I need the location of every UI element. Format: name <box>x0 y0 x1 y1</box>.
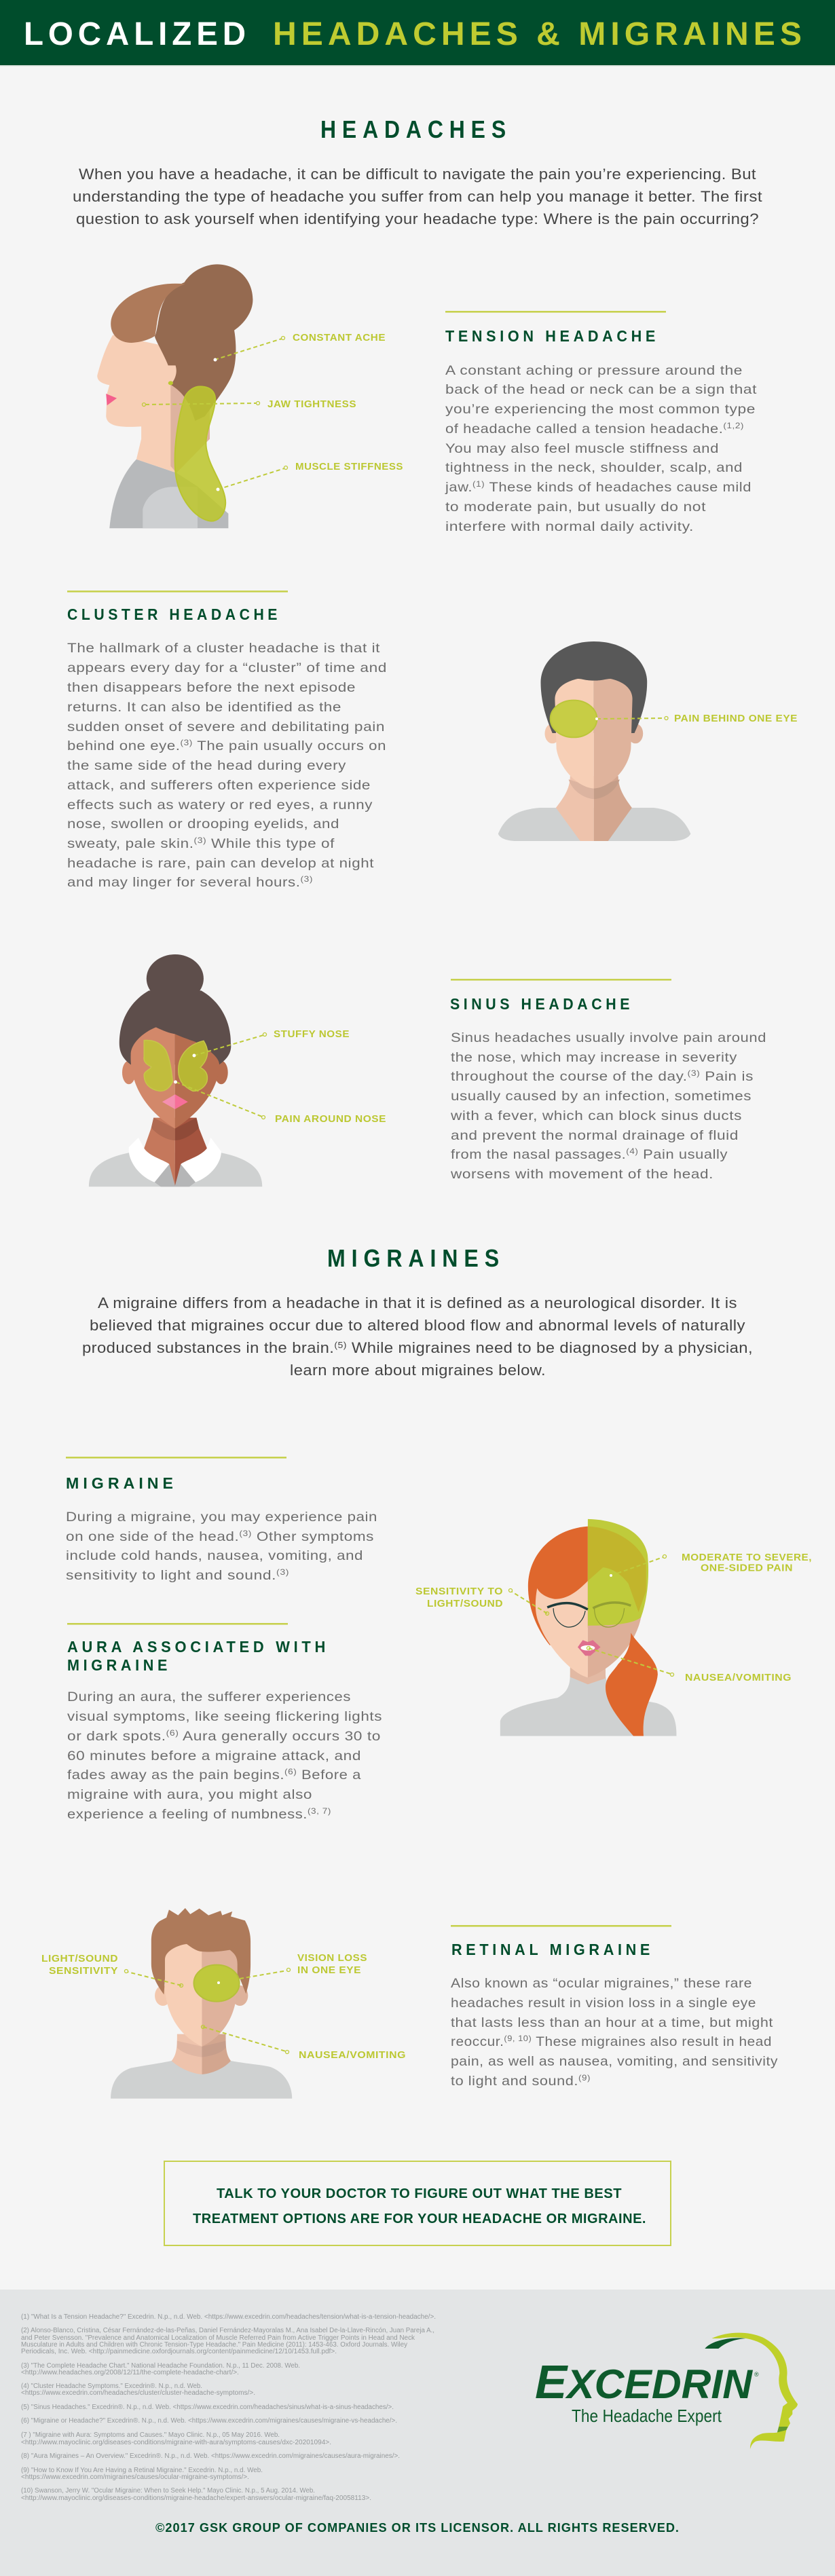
logo: Excedrin: The Headache Expert <box>572 2406 722 2426</box>
body text: retinal migraine: reoccur. <box>451 2034 500 2049</box>
callout box: talk to your doctor <box>164 2161 671 2245</box>
heading: migraines: MIGRAINES <box>327 1244 505 1272</box>
body text: cluster headache: returns. It can also be identified as the <box>67 700 341 715</box>
callout: pain around nose: PAIN AROUND NOSE <box>275 1114 386 1125</box>
body text: cluster headache: (3) <box>180 738 193 747</box>
panel: sinus headache <box>89 954 766 1187</box>
body text: tension headache: back of the head or neck can be a sign that <box>445 382 757 397</box>
body text: aura: 60 minutes before a migraine attack, and <box>67 1749 361 1763</box>
references: <http://www.headaches.org/2008/12/11/the-complete-headache-chart/>. <box>21 2369 239 2376</box>
body text: tension headache: interfere with normal daily activity. <box>445 519 694 534</box>
body text: retinal migraine: Also known as “ocular migraines,” these rare <box>451 1976 752 1991</box>
intro text: headaches <box>73 166 762 227</box>
body text: aura: (3, 7) <box>308 1806 331 1816</box>
heading: sinus headache: SINUS HEADACHE <box>450 995 633 1013</box>
callout box: talk to your doctor: TREATMENT OPTIONS ARE FOR YOUR HEADACHE OR MIGRAINE. <box>193 2211 646 2226</box>
intro text: migraines: A migraine differs from a headache in that it is defined as a neurological disorder. It is <box>98 1294 737 1311</box>
logo: Excedrin <box>535 2333 798 2449</box>
references: (6) "Migraine or Headache?" Excedrin®. N.p., n.d. Web. <https://www.excedrin.com/migraines/causes/migraine-vs-headache/>. <box>21 2417 397 2425</box>
callout: pain behind one eye: PAIN BEHIND ONE EYE <box>674 713 798 724</box>
heading: cluster headache: CLUSTER HEADACHE <box>67 605 281 623</box>
body text: cluster headache: (3) <box>301 874 313 884</box>
references: (2) Alonso-Blanco, Cristina, César Fernández-de-las-Peñas, Daniel Fernández-Mayoralas M., Ana Isabel De-la-Llave-Rincón, Juan Pareja A., <box>21 2327 434 2334</box>
references: (5) "Sinus Headaches." Excedrin®. N.p., n.d. Web. <https://www.excedrin.com/headaches/sinus/what-is-a-sinus-headaches/>. <box>21 2404 394 2411</box>
body text: aura: migraine with aura, you might also <box>67 1787 312 1802</box>
header banner <box>0 0 835 67</box>
intro text: migraines: (5) <box>334 1340 347 1350</box>
body text: migraine: (3) <box>239 1529 252 1538</box>
body text: sinus headache <box>450 1030 766 1182</box>
references: (7 ) "Migraine with Aura: Symptoms and Causes." Mayo Clinic. N.p., 05 May 2016. Web. <box>21 2431 280 2439</box>
intro text: migraines: While migraines need to be diagnosed by a physician, <box>347 1339 753 1356</box>
references: and Peter Svensson. "Prevalence and Anatomical Localization of Muscle Referred Pain from Active Trigger Points in Head and Neck <box>21 2334 415 2342</box>
body text: retinal migraine <box>451 1976 778 2089</box>
callout: pain around nose <box>174 1081 386 1125</box>
body text: tension headache: to moderate pain, but usually do not <box>445 500 706 515</box>
body text: aura: Aura generally occurs 30 to <box>179 1729 381 1744</box>
callout: stuffy nose: STUFFY NOSE <box>274 1029 350 1040</box>
body text: migraine: Other symptoms <box>252 1529 374 1544</box>
body text: aura: visual symptoms, like seeing flickering lights <box>67 1709 382 1724</box>
body text: cluster headache: attack, and sufferers often experience side <box>67 778 371 793</box>
callout: vision loss in one eye <box>217 1953 367 1984</box>
callout: moderate to severe one-sided pain: MODERATE TO SEVERE, <box>682 1552 812 1563</box>
body text: cluster headache: headache is rare, pain can develop at night <box>67 856 374 871</box>
callout: sensitivity to light/sound: SENSITIVITY TO <box>415 1586 503 1597</box>
body text: sinus headache: Pain is <box>700 1069 754 1084</box>
callout: light/sound sensitivity <box>41 1954 183 1987</box>
body text: tension headache: tightness in the neck, shoulder, scalp, and <box>445 460 743 475</box>
body text: migraine: include cold hands, nausea, vomiting, and <box>66 1548 363 1563</box>
callout: pain behind one eye <box>595 713 798 724</box>
callout: muscle stiffness: MUSCLE STIFFNESS <box>295 462 403 472</box>
intro text: migraines <box>82 1294 753 1379</box>
panel: tension headache <box>97 264 757 534</box>
illustration: woman front view with sinus highlight <box>89 954 262 1187</box>
title: LOCALIZED <box>24 16 250 52</box>
heading: aura associated with migraine <box>67 1638 329 1674</box>
title <box>24 16 806 52</box>
body text: retinal migraine: pain, as well as nausea, vomiting, and sensitivity <box>451 2054 778 2069</box>
callout: jaw tightness: JAW TIGHTNESS <box>267 399 356 410</box>
references: (8) "Aura Migraines – An Overview." Excedrin®. N.p., n.d. Web. <https://www.excedrin.com/migraines/causes/aura-migraines/>. <box>21 2452 400 2460</box>
body text: tension headache <box>445 363 757 534</box>
references: <https://www.excedrin.com/migraines/causes/ocular-migraine-symptoms/>. <box>21 2474 249 2481</box>
footer panel <box>0 2290 835 2576</box>
body text: tension headache: You may also feel muscle stiffness and <box>445 441 719 456</box>
body text: migraine: (3) <box>276 1567 289 1577</box>
copyright line: ©2017 GSK GROUP OF COMPANIES OR ITS LICENSOR. ALL RIGHTS RESERVED. <box>155 2521 680 2535</box>
body text: cluster headache: (3) <box>194 836 206 845</box>
body text: sinus headache: the nose, which may increase in severity <box>451 1050 737 1065</box>
body text: cluster headache: The pain usually occurs on <box>193 739 386 753</box>
callout: nausea/vomiting <box>587 1647 792 1683</box>
callout: muscle stiffness <box>216 462 403 491</box>
callout box: talk to your doctor: TALK TO YOUR DOCTOR TO FIGURE OUT WHAT THE BEST <box>217 2186 622 2201</box>
body text: migraine: During a migraine, you may experience pain <box>66 1510 377 1525</box>
references: <http://www.mayoclinic.org/diseases-conditions/migraine-with-aura/symptoms-causes/dxc-20201094>. <box>21 2439 331 2446</box>
callout: jaw tightness <box>143 399 356 410</box>
panel: migraine and aura <box>66 1457 812 1822</box>
body text: tension headache: (1) <box>472 479 485 489</box>
body text: sinus headache: usually caused by an infection, sometimes <box>451 1089 752 1104</box>
intro text: migraines: produced substances in the brain. <box>82 1339 315 1356</box>
heading: aura associated with migraine: AURA ASSOCIATED WITH <box>67 1638 329 1656</box>
logo: Excedrin: EXCEDRIN <box>535 2355 754 2408</box>
body text: cluster headache: then disappears before the next episode <box>67 680 356 695</box>
body text: retinal migraine: (9, 10) <box>504 2034 532 2043</box>
heading: migraine: MIGRAINE <box>66 1474 177 1492</box>
body text: aura: fades away as the pain begins. <box>67 1768 259 1782</box>
body text: aura: During an aura, the sufferer experiences <box>67 1690 351 1704</box>
callout: light/sound sensitivity: SENSITIVITY <box>49 1966 118 1977</box>
callout: constant ache <box>213 333 386 361</box>
body text: tension headache: (1,2) <box>723 421 744 430</box>
body text: cluster headache: sudden onset of severe and debilitating pain <box>67 720 385 734</box>
callout: nausea/vomiting: NAUSEA/VOMITING <box>299 2050 406 2061</box>
callout: nausea/vomiting <box>201 2026 406 2061</box>
body text: sinus headache: from the nasal passages. <box>451 1147 607 1162</box>
body text: sinus headache: Pain usually <box>638 1147 728 1162</box>
body text: cluster headache: The hallmark of a cluster headache is that it <box>67 641 380 656</box>
body text: migraine <box>66 1510 377 1583</box>
body text: sinus headache: throughout the course of the day. <box>451 1069 655 1084</box>
body text: cluster headache: sweaty, pale skin. <box>67 836 177 851</box>
references: <http://www.mayoclinic.org/diseases-conditions/migraine-headache/expert-answers/ocular-migraine/faq-20058113>. <box>21 2495 371 2502</box>
logo: Excedrin: ® <box>754 2371 759 2378</box>
intro text: headaches: question to ask yourself when identifying your headache type: Where is the pain occurring? <box>76 210 759 227</box>
heading: tension headache: TENSION HEADACHE <box>445 327 659 345</box>
callout: constant ache: CONSTANT ACHE <box>293 333 386 343</box>
body text: cluster headache: behind one eye. <box>67 739 166 753</box>
illustration: man with spiky hair <box>111 1908 292 2099</box>
logo head swoosh <box>705 2333 798 2449</box>
body text: sinus headache: worsens with movement of the head. <box>450 1167 713 1182</box>
intro text: headaches: understanding the type of headache you suffer from can help you manage it better. The first <box>73 188 762 205</box>
body text: sinus headache: (4) <box>626 1146 638 1156</box>
body text: sinus headache: Sinus headaches usually involve pain around <box>451 1030 766 1045</box>
body text: aura <box>67 1690 382 1822</box>
body text: aura: experience a feeling of numbness. <box>67 1807 280 1822</box>
callout: moderate to severe one-sided pain <box>610 1552 812 1577</box>
heading: headaches: HEADACHES <box>320 115 512 143</box>
body text: aura: Before a <box>297 1768 361 1782</box>
body text: cluster headache: effects such as watery or red eyes, a runny <box>67 798 373 813</box>
references: (1) "What Is a Tension Headache?" Excedrin. N.p., n.d. Web. <https://www.excedrin.com/headaches/tension/what-is-a-tension-headache/>. <box>21 2313 436 2321</box>
body text: retinal migraine: headaches result in vision loss in a single eye <box>451 1996 756 2011</box>
references <box>21 2313 436 2502</box>
body text: cluster headache: appears every day for a “cluster” of time and <box>67 660 387 675</box>
callout: light/sound sensitivity: LIGHT/SOUND <box>41 1954 118 1964</box>
body text: tension headache: jaw. <box>445 480 470 495</box>
illustration: woman in profile with hair bun <box>97 264 253 528</box>
body text: migraine: sensitivity to light and sound. <box>66 1568 246 1583</box>
intro text: migraines: learn more about migraines below. <box>290 1362 546 1379</box>
body text: migraine: on one side of the head. <box>66 1529 216 1544</box>
references: (10) Swanson, Jerry W. "Ocular Migraine: When to Seek Help." Mayo Clinic. N.p., 5 Aug. 2014. Web. <box>21 2487 315 2495</box>
body text: tension headache: These kinds of headaches cause mild <box>485 480 752 495</box>
body text: retinal migraine: These migraines also result in head <box>532 2034 772 2049</box>
references: Periodicals, Inc. Web. <http://painmedicine.oxfordjournals.org/content/painmedicine/12/10/1453.full.pdf>. <box>21 2348 337 2355</box>
callout: stuffy nose <box>193 1029 350 1058</box>
panel: retinal migraine <box>41 1908 778 2099</box>
body text: sinus headache: with a fever, which can block sinus ducts <box>450 1108 742 1123</box>
references: <https://www.excedrin.com/headaches/cluster/cluster-headache-symptoms/>. <box>21 2389 255 2397</box>
callout: sensitivity to light/sound <box>415 1586 549 1616</box>
body text: tension headache: A constant aching or pressure around the <box>445 363 743 378</box>
illustration: red-haired woman with glasses <box>500 1519 676 1736</box>
body text: tension headache: you’re experiencing the most common type <box>445 402 756 417</box>
title: HEADACHES & MIGRAINES <box>273 16 806 52</box>
references: (3) "The Complete Headache Chart." National Headache Foundation. N.p., 11 Dec. 2008. Web. <box>21 2362 300 2370</box>
body text: sinus headache: (3) <box>688 1068 700 1078</box>
panel: cluster headache <box>67 591 798 890</box>
intro text: headaches: When you have a headache, it can be difficult to navigate the pain you’re experiencing. But <box>79 166 756 183</box>
body text: retinal migraine: (9) <box>578 2073 591 2083</box>
illustration: man front view <box>498 641 690 841</box>
body text: retinal migraine: that lasts less than an hour at a time, but might <box>451 2015 773 2030</box>
references: (9) "How to Know If You Are Having a Retinal Migraine." Excedrin. N.p., n.d. Web. <box>21 2467 263 2474</box>
references: Musculature in Adults and Children with Chronic Tension-Type Headache." Pain Medicine (2011): 1453-463. Oxford Journals. Wiley <box>21 2341 407 2349</box>
body text: retinal migraine: to light and sound. <box>451 2074 565 2089</box>
heading: retinal migraine: RETINAL MIGRAINE <box>451 1941 654 1958</box>
callout: nausea/vomiting: NAUSEA/VOMITING <box>685 1673 792 1683</box>
body text: aura: (6) <box>284 1767 297 1776</box>
body text: cluster headache: the same side of the head during every <box>67 758 346 773</box>
body text: cluster headache: nose, swollen or drooping eyelids, and <box>67 817 339 832</box>
body text: tension headache: of headache called a tension headache. <box>445 422 692 436</box>
references: (4) "Cluster Headache Symptoms." Excedrin®. N.p., n.d. Web. <box>21 2383 202 2390</box>
body text: sinus headache: and prevent the normal drainage of fluid <box>451 1128 739 1143</box>
body text: cluster headache: and may linger for several hours. <box>67 875 271 890</box>
body text: cluster headache <box>67 641 387 890</box>
body text: aura: (6) <box>166 1728 179 1738</box>
body text: aura: or dark spots. <box>67 1729 152 1744</box>
intro text: migraines: believed that migraines occur due to altered blood flow and abnormal levels of naturally <box>90 1317 745 1334</box>
callout: vision loss in one eye: VISION LOSS <box>297 1953 367 1964</box>
heading: aura associated with migraine: MIGRAINE <box>67 1656 171 1674</box>
callout: sensitivity to light/sound: LIGHT/SOUND <box>427 1599 503 1609</box>
callout: vision loss in one eye: IN ONE EYE <box>297 1965 361 1976</box>
body text: cluster headache: While this type of <box>206 836 335 851</box>
callout: moderate to severe one-sided pain: ONE-SIDED PAIN <box>701 1563 793 1573</box>
